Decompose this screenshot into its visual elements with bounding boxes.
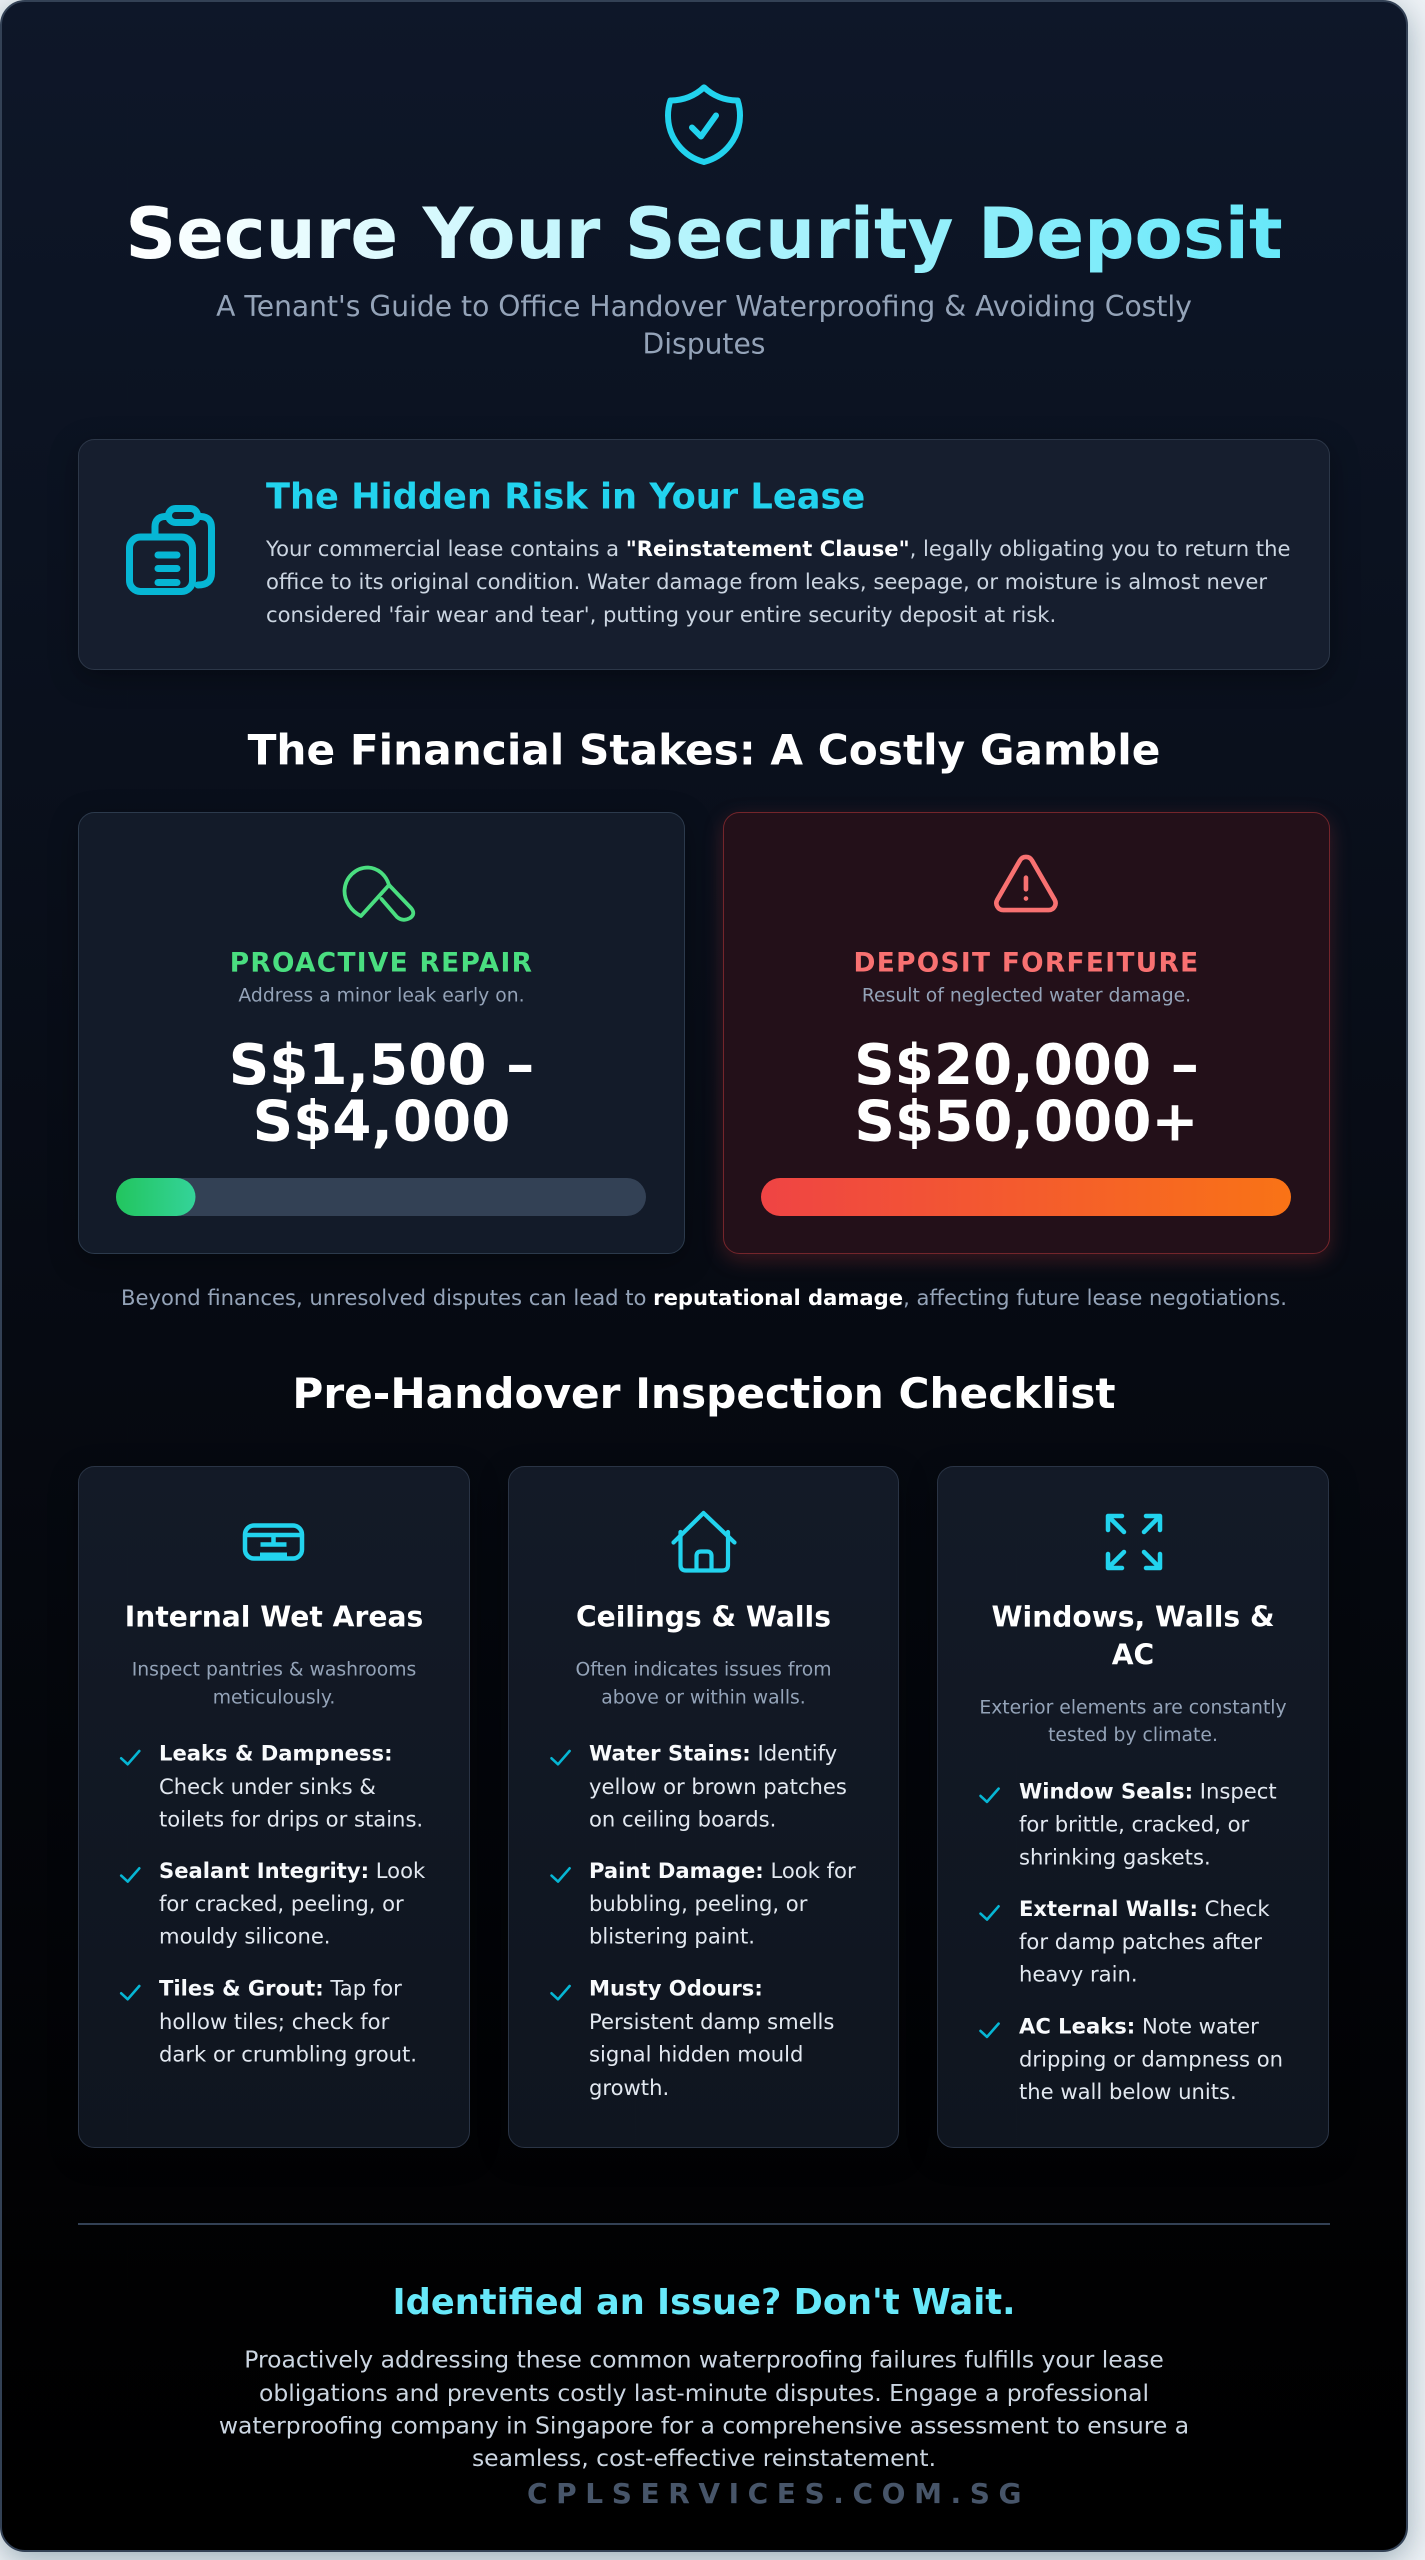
checklist item: odours: Musty Odours: xyxy=(589,1976,763,2001)
checklist item: odours xyxy=(552,1976,834,2100)
footer brand: CPLSERVICES.COM.SG xyxy=(527,2477,1030,2510)
subtitle: Disputes xyxy=(643,328,765,360)
checklist item: tiles xyxy=(121,1976,417,2067)
icon: clipboard document xyxy=(130,508,212,592)
text block: Proactively addressing these common waterproofing failures fulfills your lease xyxy=(244,2346,1164,2374)
checklist item: window seals xyxy=(980,1778,1277,1870)
checklist item: tiles: hollow tiles; check for xyxy=(159,2009,390,2034)
heading: Identified an Issue? Don't Wait. xyxy=(393,2282,1015,2323)
checklist item: sealant: Sealant Integrity: Look xyxy=(159,1858,426,1883)
price xyxy=(854,1033,1199,1155)
card description: Exterior elements are constantly xyxy=(979,1697,1287,1718)
price: S$4,000 xyxy=(253,1090,510,1155)
checklist item: paint: bubbling, peeling, or xyxy=(589,1891,808,1916)
checklist item: tiles: dark or crumbling grout. xyxy=(159,2042,417,2067)
text block: Your commercial lease contains a "Reinstatement Clause", legally obligating you to return the xyxy=(265,536,1290,561)
card description: above or within walls. xyxy=(601,1688,806,1708)
checklist item: sealant: for cracked, peeling, or xyxy=(159,1891,404,1916)
card description: Inspect pantries & washrooms xyxy=(132,1660,416,1681)
text block: waterproofing company in Singapore for a comprehensive assessment to ensure a xyxy=(219,2412,1189,2440)
text block: considered 'fair wear and tear', putting your entire security deposit at risk. xyxy=(266,602,1056,627)
text block: office to its original condition. Water damage from leaks, seepage, or moisture is almost never xyxy=(266,569,1267,594)
heading: checklist: Pre-Handover Inspection Checklist xyxy=(292,1369,1116,1418)
description: Result of neglected water damage. xyxy=(862,986,1191,1007)
note: reputational damage: Beyond finances, unresolved disputes can lead to reputational damage, affecting future lease negotiations. xyxy=(121,1285,1287,1310)
checklist item: window seals: for brittle, cracked, or xyxy=(1019,1812,1250,1836)
checklist item: external walls: heavy rain. xyxy=(1019,1962,1138,1987)
card title: Windows, Walls & xyxy=(992,1600,1274,1634)
title: Secure Your Security Deposit xyxy=(125,193,1283,275)
panel: internal wet areas xyxy=(78,1466,470,2148)
checklist item: paint: Paint Damage: Look for xyxy=(589,1858,856,1883)
price: S$20,000 – xyxy=(854,1033,1199,1098)
checklist item: leaks: toilets for drips or stains. xyxy=(159,1807,423,1832)
checklist item: AC leaks: dripping or dampness on xyxy=(1019,2047,1283,2072)
checklist item: AC leaks: AC Leaks: Note water xyxy=(1019,2013,1259,2038)
checklist item: tiles: Tiles & Grout: Tap for xyxy=(159,1976,402,2001)
progress bar xyxy=(116,1178,646,1216)
panel: proactive repair xyxy=(78,812,684,1254)
icon: warning triangle xyxy=(996,857,1056,910)
card description: meticulously. xyxy=(213,1688,335,1708)
card title: Ceilings & Walls xyxy=(576,1600,831,1634)
icon: expand arrows xyxy=(1108,1516,1160,1568)
heading: financial stakes: The Financial Stakes: A Costly Gamble xyxy=(248,726,1160,774)
header xyxy=(125,87,1283,361)
label: DEPOSIT FORFEITURE xyxy=(854,948,1199,979)
heading: The Hidden Risk in Your Lease xyxy=(266,476,865,518)
checklist item: stains: Water Stains: Identify xyxy=(589,1741,837,1766)
price: S$1,500 – xyxy=(229,1033,534,1098)
card description: tested by climate. xyxy=(1048,1725,1218,1746)
card description: Often indicates issues from xyxy=(575,1660,832,1681)
card description xyxy=(575,1660,832,1708)
checklist item: stains xyxy=(552,1741,847,1832)
checklist item: window seals: Window Seals: Inspect xyxy=(1019,1778,1277,1803)
checklist item: stains: on ceiling boards. xyxy=(589,1807,776,1832)
icon: wet area xyxy=(245,1526,302,1560)
icon: repair tool xyxy=(344,868,413,920)
description: Address a minor leak early on. xyxy=(238,986,525,1007)
call to action xyxy=(219,2282,1189,2472)
card description xyxy=(979,1697,1287,1746)
subtitle xyxy=(216,290,1192,360)
subtitle: A Tenant's Guide to Office Handover Waterproofing & Avoiding Costly xyxy=(216,290,1192,323)
panel: hidden risk xyxy=(78,440,1330,670)
card title xyxy=(992,1600,1274,1672)
checklist item: AC leaks: the wall below units. xyxy=(1019,2079,1237,2104)
checklist item: leaks: Leaks & Dampness: xyxy=(159,1741,393,1766)
card title: AC xyxy=(1112,1638,1154,1672)
checklist item: odours: signal hidden mould xyxy=(589,2042,803,2067)
checklist item: window seals: shrinking gaskets. xyxy=(1019,1844,1211,1870)
card description xyxy=(132,1660,416,1708)
checklist item: odours: Persistent damp smells xyxy=(589,2009,834,2034)
text block xyxy=(219,2346,1189,2472)
text block: obligations and prevents costly last-minute disputes. Engage a professional xyxy=(259,2379,1149,2407)
checklist item: external walls: for damp patches after xyxy=(1019,1929,1262,1954)
checklist item: external walls xyxy=(980,1896,1270,1987)
card title: Internal Wet Areas xyxy=(125,1600,423,1634)
icon: shield with check xyxy=(668,87,740,162)
checklist item: sealant: mouldy silicone. xyxy=(159,1924,331,1949)
text block xyxy=(265,536,1290,627)
panel: deposit forfeiture xyxy=(724,812,1330,1254)
text block: seamless, cost-effective reinstatement. xyxy=(472,2444,936,2472)
panel: windows, walls and AC xyxy=(938,1466,1328,2148)
panel: ceilings and walls xyxy=(508,1466,898,2148)
checklist item: paint xyxy=(552,1858,856,1949)
checklist item: leaks xyxy=(121,1741,423,1832)
checklist item: paint: blistering paint. xyxy=(589,1924,755,1949)
icon: house xyxy=(674,1513,734,1570)
progress bar xyxy=(761,1178,1291,1216)
checklist item: odours: growth. xyxy=(589,2075,669,2100)
price xyxy=(229,1033,534,1155)
label: PROACTIVE REPAIR xyxy=(230,948,533,979)
checklist item: leaks: Check under sinks & xyxy=(159,1774,376,1799)
checklist item: AC leaks xyxy=(980,2013,1283,2104)
checklist item: external walls: External Walls: Check xyxy=(1019,1896,1270,1921)
price: S$50,000+ xyxy=(854,1090,1199,1155)
checklist item: stains: yellow or brown patches xyxy=(589,1774,847,1799)
checklist item: sealant xyxy=(121,1858,426,1949)
